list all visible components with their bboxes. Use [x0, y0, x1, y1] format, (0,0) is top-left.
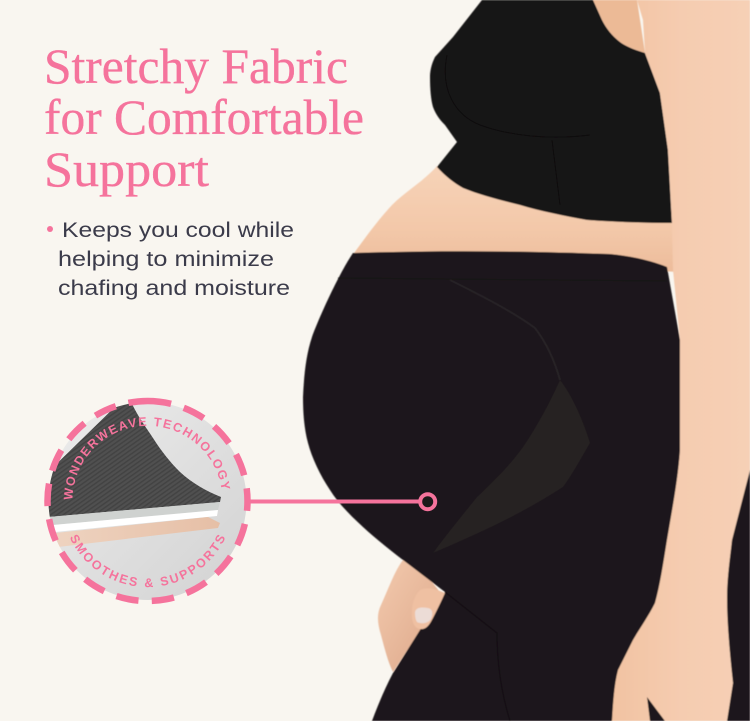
panel seam [450, 280, 560, 380]
callout connector line [248, 494, 435, 509]
dashed ring [30, 384, 265, 618]
title: Stretchy Fabric [44, 38, 348, 94]
title: Support [44, 141, 209, 197]
waistband seam [338, 278, 667, 281]
fabric layers [40, 400, 221, 547]
legging fold [445, 592, 510, 721]
title: for Comfortable [44, 89, 364, 145]
sports bra [430, 0, 672, 223]
side mesh panel [433, 380, 590, 553]
fabric callout circle [44, 398, 251, 604]
bullet text: Keeps you cool while [62, 218, 294, 242]
connector ring [420, 494, 435, 509]
hand behind belly [378, 560, 446, 672]
skin: midriff [352, 166, 680, 272]
curved label: bottom: SMOOTHES & SUPPORTS [70, 534, 224, 588]
finger with nail [412, 588, 445, 629]
arm [612, 0, 750, 721]
leggings [303, 251, 750, 721]
bullet text: helping to minimize [58, 247, 274, 271]
model photo illustration [303, 0, 750, 721]
bullet text [47, 218, 294, 300]
disk background [48, 402, 246, 600]
bra seam [445, 55, 590, 205]
shoulder skin [593, 0, 645, 53]
bullet text: chafing and moisture [58, 276, 290, 300]
curved label: top: WONDERWEAVE TECHNOLOGY [64, 417, 230, 500]
title [44, 38, 364, 197]
